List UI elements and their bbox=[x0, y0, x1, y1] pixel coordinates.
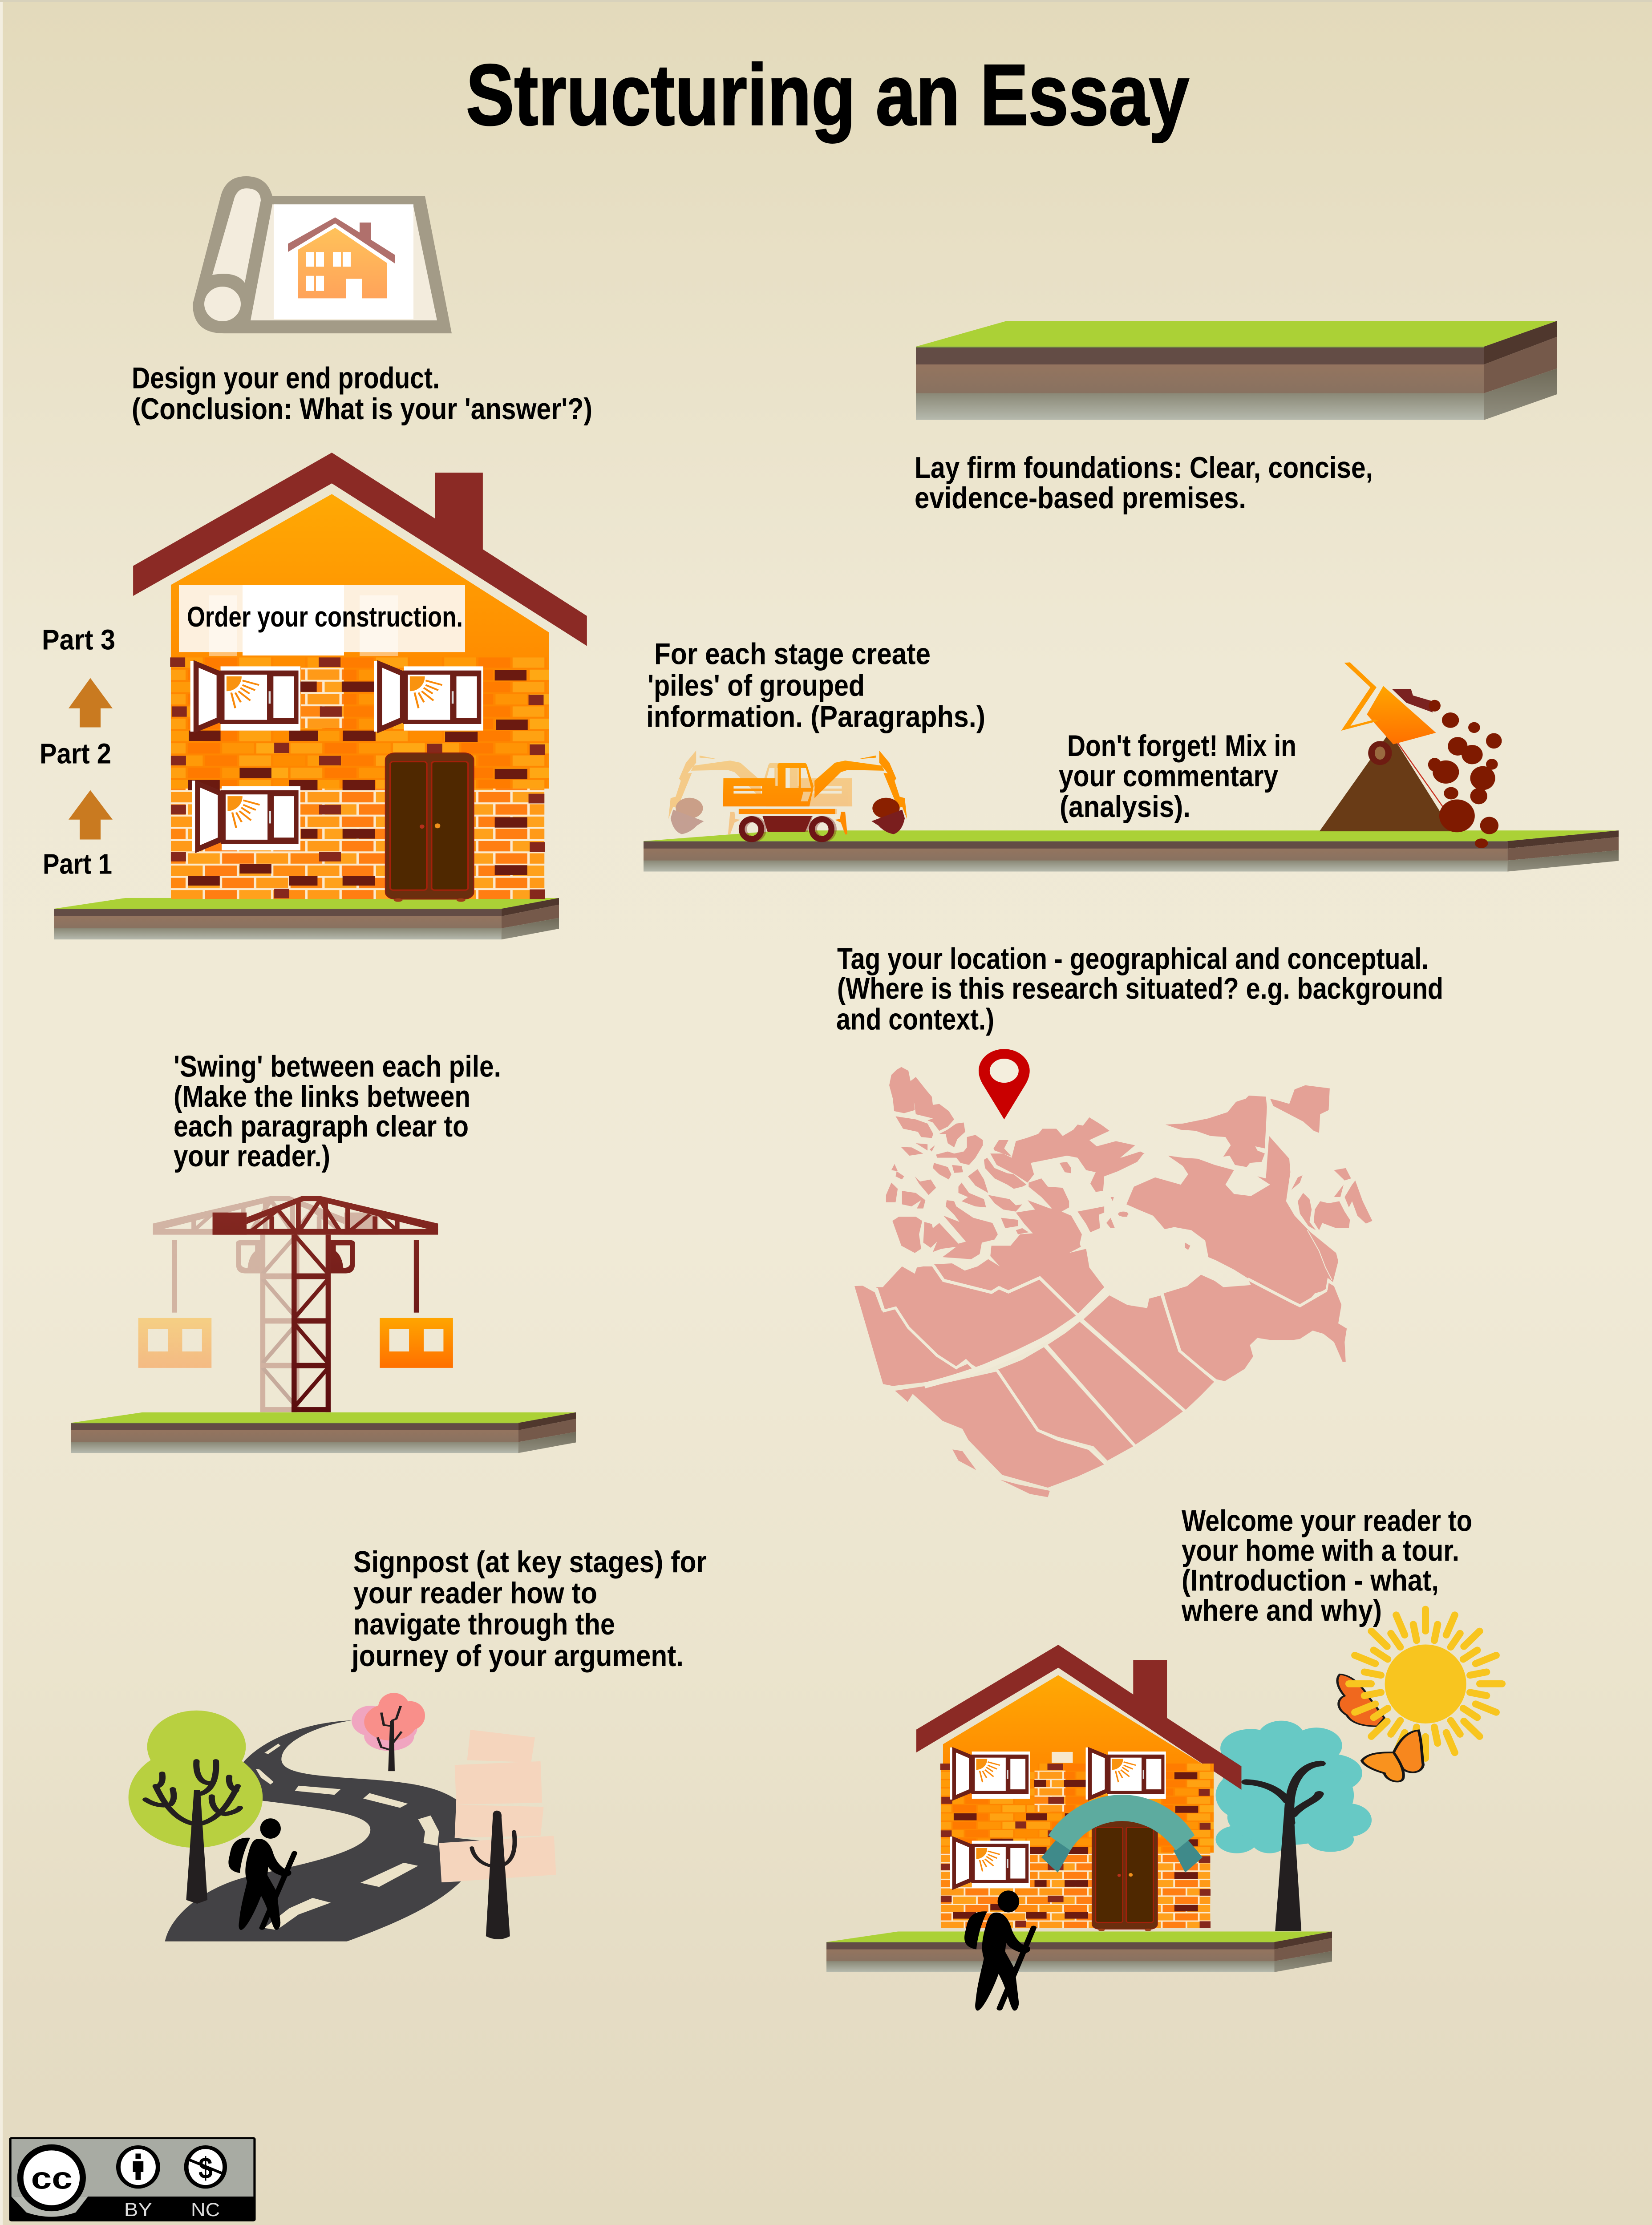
text: tag your location: and context.) bbox=[836, 1002, 994, 1036]
load bbox=[1392, 689, 1433, 712]
illustration: main house bbox=[133, 453, 587, 902]
southern provinces bbox=[895, 1295, 1215, 1497]
excavator ghost swing bbox=[668, 750, 852, 842]
ground: main house bbox=[54, 898, 559, 939]
text: do not forget bbox=[1059, 728, 1296, 824]
non commercial icon: $ bbox=[198, 2152, 213, 2185]
text: do not forget: your commentary bbox=[1059, 759, 1279, 793]
northwest territories and arctic islands bbox=[854, 1067, 1144, 1386]
arrow up lower bbox=[69, 790, 113, 840]
text: swing between piles: your reader.) bbox=[174, 1139, 330, 1173]
text: welcome your reader: (Introduction - what, bbox=[1182, 1563, 1439, 1597]
illustration: excavator bbox=[668, 750, 907, 842]
territorial borders bbox=[876, 1266, 1106, 1386]
teal tree bbox=[1216, 1721, 1372, 1931]
cactus tree bbox=[472, 1811, 514, 1939]
text: create piles: For each stage create bbox=[654, 636, 931, 671]
map of Canada with pin bbox=[854, 1049, 1373, 1497]
excavator main bbox=[723, 750, 907, 842]
text: swing between piles: each paragraph clear to bbox=[174, 1109, 469, 1143]
illustration: wheelbarrow and pile bbox=[1320, 663, 1502, 848]
text: welcome your reader bbox=[1181, 1503, 1472, 1627]
butterfly lower right bbox=[1362, 1730, 1423, 1782]
text: tag your location: Tag your location - geographical and conceptual. bbox=[837, 941, 1429, 975]
house gable bbox=[943, 1675, 1211, 1768]
BY label: BY bbox=[124, 2199, 152, 2220]
text: swing between piles: 'Swing' between each pile. bbox=[174, 1049, 501, 1084]
illustration: road scene bbox=[129, 1693, 556, 1942]
text: lay firm foundations: Lay firm foundations: Clear, concise, bbox=[915, 450, 1373, 485]
text: welcome your reader: where and why) bbox=[1181, 1593, 1382, 1627]
ground: crane bbox=[71, 1412, 576, 1453]
window lower left bbox=[950, 1836, 1030, 1890]
badge frame bbox=[9, 2137, 256, 2221]
crane ghost bbox=[153, 1196, 378, 1412]
text: design your end product: Design your end product. bbox=[132, 361, 440, 395]
house roof bbox=[133, 453, 587, 646]
ground: welcome house bbox=[826, 1931, 1332, 1972]
attribution icon bbox=[116, 2145, 160, 2189]
icon: blueprint with house plan bbox=[193, 176, 452, 333]
text: tag your location bbox=[836, 941, 1443, 1036]
NC label: NC bbox=[191, 2199, 220, 2220]
hiker on road bbox=[228, 1818, 295, 1930]
crane main bbox=[213, 1196, 438, 1412]
badge: creative commons BY NC bbox=[9, 2137, 256, 2221]
label: part 2: Part 2 bbox=[40, 737, 111, 769]
non commercial icon bbox=[184, 2145, 227, 2189]
title: Structuring an Essay bbox=[466, 46, 1189, 143]
sun rays bbox=[1349, 1609, 1502, 1758]
pale panel bbox=[1052, 1752, 1073, 1763]
load bbox=[380, 1318, 453, 1368]
stacked boxes bbox=[439, 1730, 556, 1882]
hiker at house bbox=[964, 1890, 1033, 2011]
text: signpost: Signpost (at key stages) for bbox=[353, 1545, 707, 1579]
text: design your end product: (Conclusion: What is your 'answer'?) bbox=[132, 392, 592, 426]
text: welcome your reader: Welcome your reader to bbox=[1182, 1503, 1472, 1537]
label: part 3: Part 3 bbox=[42, 623, 115, 655]
front door bbox=[385, 753, 474, 902]
window upper right bbox=[374, 660, 483, 733]
cc icon: cc bbox=[31, 2161, 73, 2196]
wheel bbox=[1368, 741, 1392, 765]
welcome ribbon bbox=[1041, 1795, 1203, 1873]
window upper right bbox=[1086, 1747, 1166, 1801]
text: do not forget: Don't forget! Mix in bbox=[1067, 728, 1296, 763]
pink tree bbox=[352, 1693, 425, 1771]
window lower left bbox=[192, 780, 300, 853]
arrow up upper bbox=[69, 678, 113, 728]
house roof bbox=[916, 1645, 1241, 1790]
soil pile bbox=[1320, 732, 1453, 831]
door bbox=[1092, 1821, 1158, 1931]
sun disc bbox=[1385, 1644, 1466, 1723]
text: swing between piles: (Make the links between bbox=[174, 1079, 470, 1113]
brick wall bbox=[170, 657, 549, 899]
map pin bbox=[979, 1049, 1030, 1120]
road dashes bbox=[256, 1744, 439, 1930]
illustration: crane bbox=[138, 1196, 453, 1412]
text: signpost: journey of your argument. bbox=[351, 1638, 684, 1673]
text: tag your location: (Where is this research situated? e.g. background bbox=[837, 971, 1443, 1005]
text: signpost: navigate through the bbox=[353, 1607, 615, 1641]
label box: order your construction bbox=[179, 585, 465, 656]
butterfly left bbox=[1337, 1675, 1384, 1726]
text: welcome your reader: your home with a tour. bbox=[1182, 1533, 1459, 1567]
eastern provinces bbox=[1118, 1085, 1373, 1381]
text: create piles: 'piles' of grouped bbox=[648, 668, 865, 702]
label: part 1: Part 1 bbox=[43, 848, 112, 880]
text: lay firm foundations bbox=[915, 450, 1373, 515]
text: do not forget: (analysis). bbox=[1060, 789, 1190, 824]
text: create piles bbox=[646, 636, 985, 733]
ground: foundations bbox=[916, 321, 1557, 420]
green tree bbox=[129, 1711, 263, 1904]
illustration: welcome scene bbox=[916, 1644, 1466, 1931]
label box: order your construction: Order your construction. bbox=[187, 601, 463, 633]
house gable bbox=[171, 494, 549, 675]
barrow body bbox=[1367, 686, 1436, 744]
provincial borders bbox=[997, 1295, 1215, 1464]
text: swing between piles bbox=[174, 1049, 501, 1173]
ground: excavator and pile bbox=[644, 830, 1619, 872]
window upper left bbox=[950, 1747, 1030, 1801]
load ghost bbox=[138, 1318, 211, 1368]
winding road bbox=[165, 1720, 480, 1942]
text: design your end product bbox=[132, 361, 592, 426]
window upper left bbox=[190, 660, 300, 733]
text: lay firm foundations: evidence-based premises. bbox=[915, 481, 1246, 515]
text: create piles: information. (Paragraphs.) bbox=[646, 699, 985, 733]
text: signpost: your reader how to bbox=[353, 1576, 597, 1610]
cc icon bbox=[17, 2144, 86, 2211]
brick wall bbox=[940, 1764, 1214, 1928]
text: signpost bbox=[351, 1545, 707, 1673]
falling rocks bbox=[1428, 700, 1502, 848]
